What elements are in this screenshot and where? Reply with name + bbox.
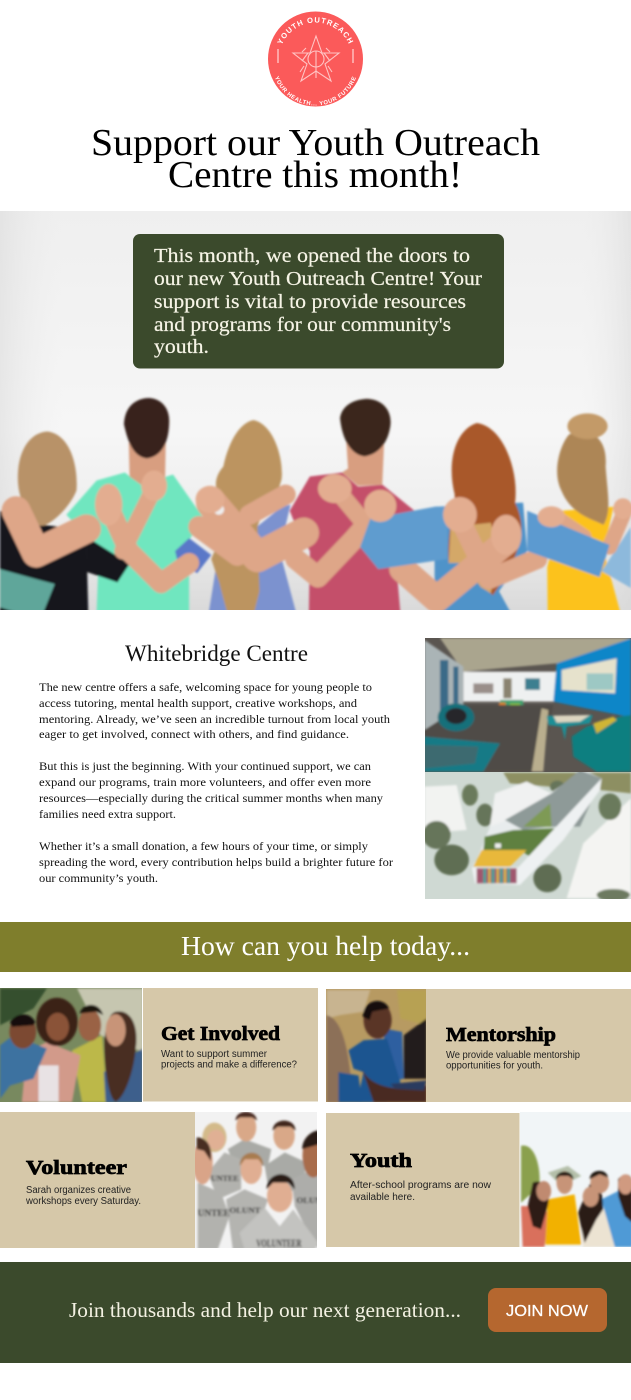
icon: Youth Outreach logo badge: [268, 12, 363, 106]
photo: smiling mentor: [326, 989, 427, 1102]
card: Youth: After-school programs are now: [350, 1180, 492, 1191]
banner: How can you help today: [0, 922, 631, 972]
card: Volunteer: Sarah organizes creative: [26, 1185, 131, 1196]
panel: call to action footer: [0, 1262, 631, 1363]
text block: centre description: spreading the word, every contribution helps build a brighter future for: [39, 855, 393, 869]
card: Volunteer: [0, 1112, 324, 1250]
button: JOIN NOW: [488, 1288, 607, 1332]
photo: volunteers in grey shirts: VOLUNTEER: [256, 1238, 302, 1250]
photo: volunteers in grey shirts: [193, 1112, 324, 1250]
card: Mentorship: [326, 989, 631, 1102]
photo: volunteers in grey shirts: UNTEE: [211, 1174, 239, 1183]
photo: centre interior: [424, 638, 631, 772]
text block: centre description: expand our programs, train more volunteers, and offer even more: [39, 775, 371, 789]
card: Get Involved: [0, 988, 318, 1102]
text block: centre description: access tutoring, mental health support, creative workshops, and: [39, 696, 357, 710]
card: Get Involved: Want to support summer: [161, 1049, 268, 1060]
card: Get Involved: Get Involved: [161, 1023, 280, 1045]
photo: volunteers in grey shirts: OLUN: [296, 1195, 322, 1205]
text block: centre description: our community’s youth.: [39, 871, 158, 885]
card: Youth: available here.: [350, 1192, 415, 1203]
title: Support our Youth Outreach: [91, 122, 540, 164]
photo: four young friends: [0, 988, 143, 1102]
banner: How can you help today: How can you help today...: [181, 931, 470, 961]
callout: opening announcement: support is vital to provide resources: [154, 291, 466, 313]
card: Volunteer: Volunteer: [26, 1157, 127, 1179]
icon: Youth Outreach logo badge: YOUR HEALTH... YOUR FUTURE: [275, 76, 356, 106]
photo: volunteers in grey shirts: UNTEE: [198, 1209, 230, 1219]
photo: centre building rendering: [423, 770, 631, 901]
button: JOIN NOW: JOIN NOW: [506, 1303, 589, 1320]
callout: opening announcement: and programs for our community's: [154, 314, 451, 336]
card: Get Involved: projects and make a difference?: [161, 1060, 297, 1070]
text block: centre description: The new centre offers a safe, welcoming space for young people to: [39, 680, 372, 694]
card: Volunteer: workshops every Saturday.: [25, 1196, 141, 1207]
text block: centre description: [39, 680, 393, 885]
text: join message: Join thousands and help our next generation...: [69, 1298, 461, 1322]
title: [91, 122, 540, 196]
heading: Whitebridge Centre: Whitebridge Centre: [125, 641, 308, 666]
card: Mentorship: opportunities for youth.: [446, 1060, 543, 1072]
callout: opening announcement: This month, we opened the doors to: [154, 245, 470, 267]
icon: Youth Outreach logo badge: YOUTH OUTREACH: [277, 17, 354, 44]
card: Mentorship: Mentorship: [446, 1024, 556, 1046]
callout: opening announcement: youth.: [154, 336, 209, 358]
photo: volunteers in grey shirts: OLUNT: [229, 1205, 261, 1215]
text block: centre description: Whether it’s a small donation, a few hours of your time, or simply: [39, 839, 368, 853]
text block: centre description: eager to get involved, connect with others, and find guidance.: [39, 727, 349, 741]
text block: centre description: mentoring. Already, we’ve seen an incredible turnout from local youth: [39, 712, 390, 726]
callout: opening announcement: [133, 234, 504, 368]
text block: centre description: resources—especially during the critical summer months when many: [39, 791, 383, 805]
text block: centre description: families need extra support.: [39, 807, 176, 821]
title: Centre this month!: [168, 154, 462, 196]
callout: opening announcement: our new Youth Outreach Centre! Your: [154, 268, 482, 290]
photo: group of teens outdoors: [520, 1112, 631, 1247]
panel: hero photo of youth with linked arms: [0, 211, 631, 654]
card: Youth: Youth: [350, 1150, 412, 1172]
card: Youth: [326, 1112, 631, 1247]
card: Mentorship: We provide valuable mentorship: [446, 1050, 580, 1061]
text block: centre description: But this is just the beginning. With your continued support, we can: [39, 759, 371, 773]
